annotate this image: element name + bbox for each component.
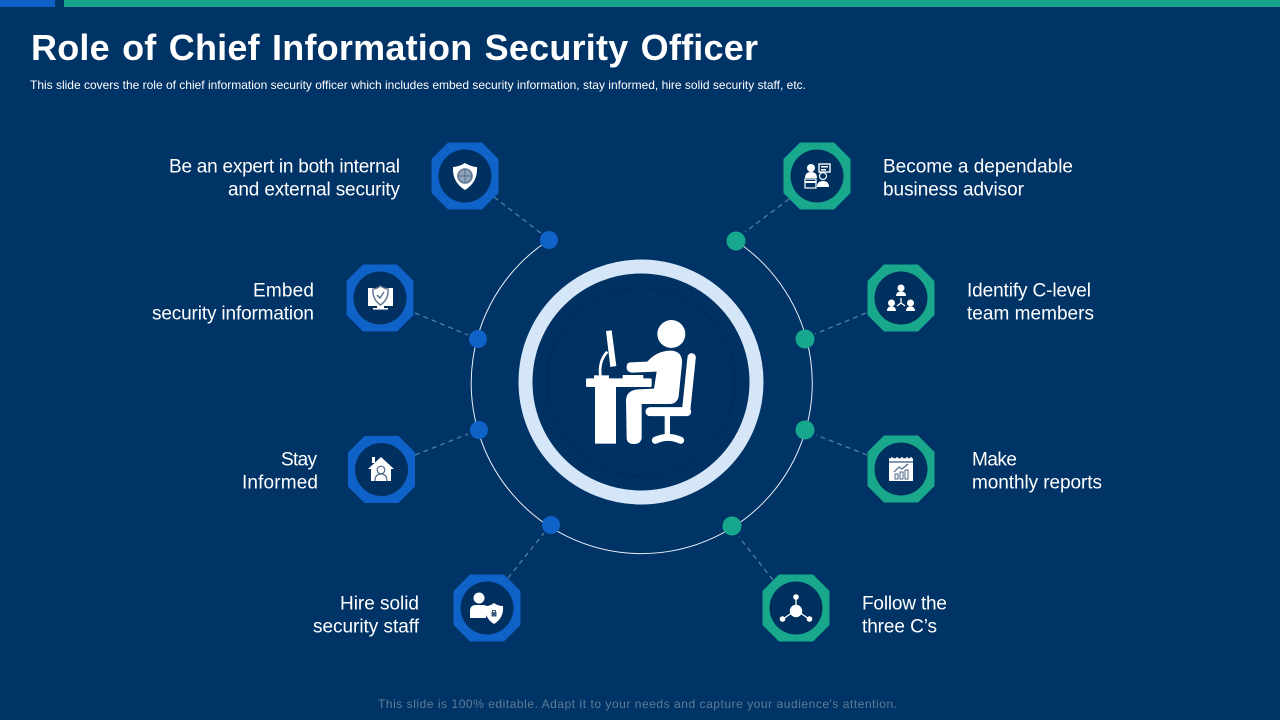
label: Be an expert in both internal [169,157,400,178]
item: identify c-level team members [868,264,1094,332]
label: Embed [253,281,314,302]
item: expert in security [169,142,498,210]
octagon badge [762,574,830,642]
top accent bar [0,0,1280,7]
octagon badge [868,436,934,502]
label: Hire solid [340,594,419,615]
octagon badge [454,574,520,642]
item: stay informed [242,436,415,503]
label: Become a dependable [883,157,1073,178]
icon: globe shield [453,163,477,190]
label [862,594,947,638]
label: security information [152,304,314,325]
label: team members [967,304,1094,325]
label [152,281,314,325]
label [883,157,1073,201]
label: and external security [228,180,400,201]
label [972,450,1102,494]
label: Follow the [862,594,947,615]
central circle [526,266,756,498]
outer thin ring arc [471,240,812,554]
item: follow the three cs [762,574,947,642]
icon: calendar chart [889,457,913,481]
icon: team hierarchy [887,284,915,311]
icon: person with shield [470,592,503,624]
icon: advisors with speech bubbles [805,164,830,188]
icon: three connected nodes [780,594,812,622]
octagon badge [348,436,415,503]
label: monthly reports [972,473,1102,494]
octagon badge [432,142,498,210]
label: three C’s [862,617,937,638]
icon: house with person [368,457,394,481]
item: make monthly reports [868,436,1102,502]
label: business advisor [883,180,1025,201]
label: Informed [242,473,318,494]
label [313,594,420,638]
item: dependable business advisor [784,142,1073,210]
octagon badge [346,264,414,332]
label [169,157,400,201]
label [242,450,318,494]
octagon badge [784,142,850,210]
ring dots [469,231,814,536]
label: Identify C-level [967,281,1091,302]
footer note: This slide is 100% editable. Adapt it to your needs and capture your audience's attention. [378,697,897,711]
label: security staff [313,617,420,638]
label [967,281,1094,325]
label: Make [972,450,1017,471]
subtitle: This slide covers the role of chief information security officer which includes embed security information, stay informed, hire solid security staff, etc. [30,78,806,92]
dashed connectors [415,197,867,580]
icon: monitor shield [368,286,393,310]
item: embed security information [152,264,414,332]
title: Role of Chief Information Security Officer [31,27,758,68]
item: hire solid security staff [313,574,520,642]
octagon badge [868,264,934,332]
label: Stay [281,450,318,471]
icon: person at desk [586,320,692,444]
